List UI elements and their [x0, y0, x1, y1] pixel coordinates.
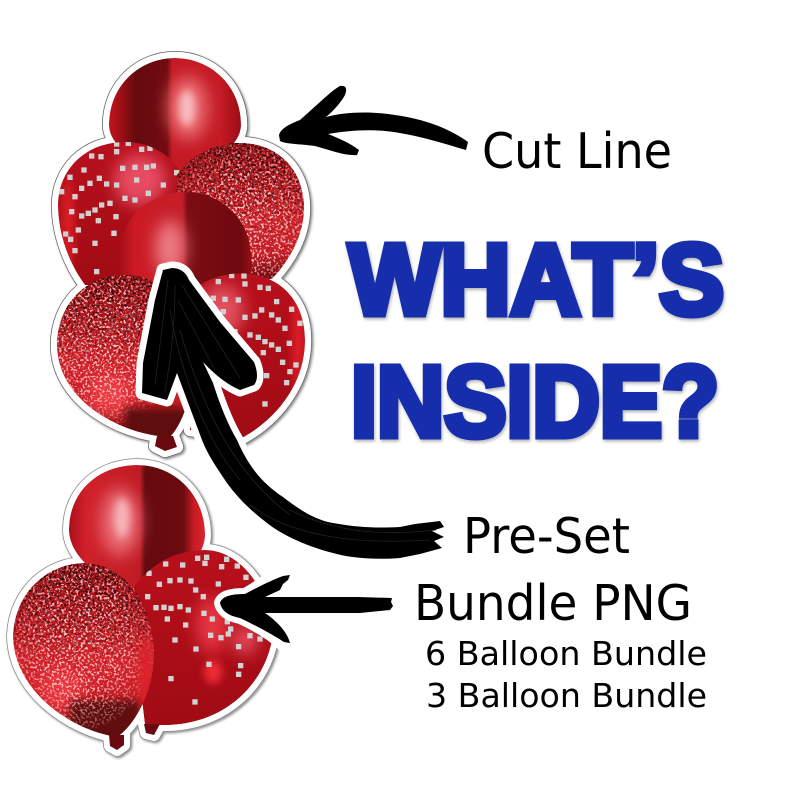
arrow outline — [220, 570, 296, 650]
arrow outline — [142, 268, 400, 559]
arrow: top, pointing to cut line — [279, 86, 468, 155]
cut line outline — [13, 465, 272, 750]
balloon: right glitter — [176, 143, 304, 279]
balloon: lower left glitter — [57, 275, 184, 436]
arrow body — [220, 575, 393, 643]
label: pre-set bundle png: Bundle PNG — [414, 575, 692, 632]
arrow: long curved, pointing to inner balloon — [142, 268, 444, 559]
balloon: centre chrome — [122, 192, 251, 285]
three balloon pre-set bundle — [10, 465, 272, 750]
balloon: right confetti — [130, 550, 272, 725]
cut line outline — [57, 58, 305, 451]
heading line 1: WHAT’S — [349, 224, 724, 336]
label: cut line: Cut Line — [482, 123, 672, 180]
balloon knots — [109, 724, 160, 750]
balloon: left glitter — [13, 563, 154, 736]
label: bundle sizes — [425, 634, 707, 715]
balloon: top chrome — [109, 58, 241, 172]
heading line 2: INSIDE? — [351, 346, 719, 458]
balloon: lower right confetti — [190, 273, 305, 438]
arrow body — [142, 268, 444, 559]
arrow: short, pointing to pre-set bundle — [220, 570, 393, 650]
balloon knot — [155, 436, 177, 451]
balloon: top chrome — [69, 465, 205, 590]
brush streaks — [155, 280, 436, 541]
label: pre-set bundle png — [414, 508, 692, 632]
balloon: left confetti — [58, 142, 180, 290]
heading: what's inside — [349, 224, 724, 458]
six balloon cut-line bundle — [50, 58, 310, 451]
label: bundle sizes: 6 Balloon Bundle — [425, 634, 707, 673]
label: pre-set bundle png: Pre-Set — [463, 508, 630, 565]
label: bundle sizes: 3 Balloon Bundle — [426, 676, 707, 715]
